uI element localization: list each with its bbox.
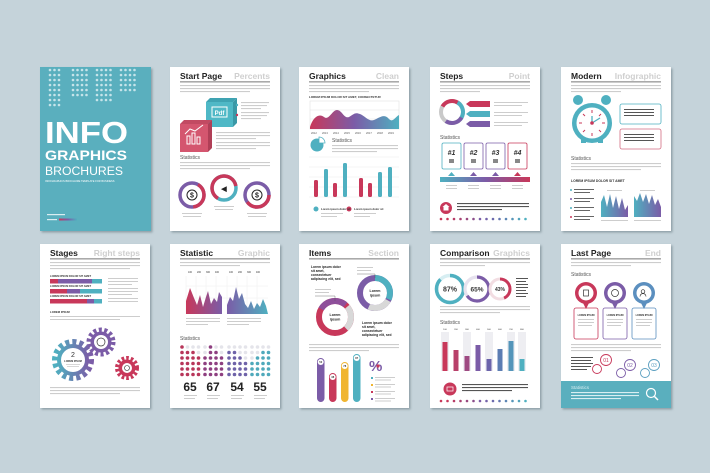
percent legend xyxy=(369,358,395,402)
cover title xyxy=(45,115,128,183)
gears: LOREM IPSUM xyxy=(64,360,82,363)
panel: last page xyxy=(561,244,671,408)
text blocks: adipiscing elit, sed xyxy=(311,277,340,281)
panel: start page: $ xyxy=(255,192,259,200)
dots row xyxy=(440,400,527,402)
heading: Graphics xyxy=(309,71,346,81)
heading: Graphics xyxy=(493,248,530,258)
pin icons with boxes: LOREM IPSUM xyxy=(607,314,623,317)
bar chart: 100 xyxy=(443,329,448,331)
icon: home circle + text xyxy=(440,202,529,214)
panel: cover xyxy=(40,67,151,231)
area chart: 2012 xyxy=(311,131,317,135)
icon: teal presentation box: Pdf xyxy=(215,111,225,117)
icon: teal presentation box xyxy=(206,98,237,127)
heading xyxy=(440,248,530,259)
percent donuts: 43% xyxy=(495,287,506,293)
heading: Point xyxy=(509,71,530,81)
statistics text: Statistics xyxy=(180,155,201,161)
heading: Clean xyxy=(376,71,399,81)
dot grids xyxy=(180,345,270,376)
donut 1: Lorem xyxy=(370,289,380,293)
area charts: 300 xyxy=(247,271,252,274)
heading xyxy=(571,248,661,259)
icon: pink chart box xyxy=(180,120,212,152)
panel: graphics xyxy=(299,67,409,231)
legend xyxy=(314,206,383,217)
panel: stages: LOREM IPSUM xyxy=(50,310,70,314)
heading: Percents xyxy=(234,71,270,81)
pin icons with boxes: LOREM IPSUM xyxy=(578,314,594,317)
area chart: 2013 xyxy=(322,131,328,135)
progress bars: LOREM IPSUM DOLOR SIT AMET xyxy=(50,294,92,298)
donut 2: Lorem xyxy=(330,313,340,317)
callout boxes xyxy=(620,104,661,149)
text blocks: consectetuer xyxy=(311,273,332,277)
heading: Start Page xyxy=(180,71,222,81)
bar chart: 500 xyxy=(487,329,492,331)
donut 1: ipsum xyxy=(370,294,380,298)
heading: Stages xyxy=(50,248,78,258)
bar chart: 800 xyxy=(520,329,525,331)
panel: start page: $ xyxy=(190,192,194,200)
bullets xyxy=(216,102,270,149)
bar chart: 300 xyxy=(465,329,470,331)
panel: steps: #1 xyxy=(448,150,455,157)
panel: steps: #4 xyxy=(514,150,521,157)
area charts: 100 xyxy=(188,271,193,274)
numbered circles: 02 xyxy=(627,363,633,369)
legend: Lorem ipsum dolor sit xyxy=(354,207,383,211)
heading: Graphic xyxy=(238,248,270,258)
bar chart: 600 xyxy=(498,329,503,331)
numbers: 67 xyxy=(206,380,220,394)
area charts: 200 xyxy=(197,271,202,274)
percent donuts: 65% xyxy=(470,286,484,294)
icon: pie xyxy=(310,137,325,152)
pin icons with boxes: LOREM IPSUM xyxy=(636,314,652,317)
heading: Right steps xyxy=(94,248,140,258)
panel: items xyxy=(299,244,409,408)
footer band: Statistics xyxy=(571,385,590,390)
panel: steps: #3 xyxy=(492,150,499,157)
icon: alarm clock xyxy=(572,95,612,143)
heading xyxy=(309,71,399,82)
numbers xyxy=(183,380,267,394)
panel: stages xyxy=(40,244,150,408)
donut xyxy=(437,97,467,127)
statistics text xyxy=(332,138,398,152)
statistics text: Statistics xyxy=(332,138,353,144)
dots row xyxy=(440,218,527,220)
arrows xyxy=(466,101,528,127)
area charts xyxy=(186,271,268,325)
heading xyxy=(309,248,399,259)
bar chart: 400 xyxy=(476,329,481,331)
progress bars: LOREM IPSUM DOLOR SIT AMET xyxy=(50,284,92,288)
area charts: 100 xyxy=(229,271,234,274)
pin icons with boxes xyxy=(574,282,656,339)
heading xyxy=(180,71,270,82)
percent legend: % xyxy=(369,358,382,375)
heading: Last Page xyxy=(571,248,611,258)
area charts: 400 xyxy=(256,271,261,274)
heading: Infographic xyxy=(615,71,661,81)
timeline bar xyxy=(440,172,530,189)
heading: Statistic xyxy=(180,248,213,258)
bar chart xyxy=(441,329,526,371)
panel: statistic: Statistics xyxy=(180,336,201,342)
area charts: 400 xyxy=(215,271,220,274)
area chart: 2018 xyxy=(377,131,383,135)
footer band xyxy=(561,381,671,408)
area chart: 2015 xyxy=(344,131,350,135)
dot pattern xyxy=(49,69,136,106)
bar chart: 200 xyxy=(454,329,459,331)
cover title: INFOGRAPHICS BROCHURE TEMPLATE FOR BUSINESS xyxy=(45,179,115,183)
text blocks xyxy=(311,265,393,337)
cover footer xyxy=(47,214,77,220)
numbers: 54 xyxy=(230,380,244,394)
donut 2 xyxy=(312,289,358,340)
legend: Lorem ipsum dolor sit xyxy=(321,207,350,211)
heading: Modern xyxy=(571,71,602,81)
numbers: 65 xyxy=(183,380,197,394)
text blocks: Lorem ipsum dolor xyxy=(311,265,342,269)
cover title: BROCHURES xyxy=(45,166,123,178)
area charts: 200 xyxy=(238,271,243,274)
heading xyxy=(571,71,661,82)
gears xyxy=(55,330,137,378)
percent donuts: 87% xyxy=(443,286,458,294)
panel: modern xyxy=(561,67,671,231)
progress bars: LOREM IPSUM DOLOR SIT AMET xyxy=(50,274,92,278)
step boxes xyxy=(442,143,527,169)
statistics text xyxy=(180,155,270,169)
numbered circles: 03 xyxy=(651,363,657,369)
cover title: GRAPHICS xyxy=(45,147,127,163)
heading: Section xyxy=(368,248,399,258)
numbered circles xyxy=(571,354,660,378)
heading: Comparison xyxy=(440,248,490,258)
area chart: 2019 xyxy=(388,131,394,135)
icon: circle + text xyxy=(444,382,528,396)
panel: last page: Statistics xyxy=(571,272,592,278)
text blocks: sit amet, xyxy=(362,325,375,329)
area chart: 2017 xyxy=(366,131,372,135)
numbers: 55 xyxy=(253,380,267,394)
progress bars xyxy=(50,274,138,304)
area chart: 2014 xyxy=(333,131,339,135)
heading: End xyxy=(645,248,661,258)
bar chart: 52 xyxy=(319,360,323,364)
bar chart: 38 xyxy=(331,375,335,379)
bar chart: 78 xyxy=(343,364,347,368)
text blocks: adipiscing elit, sed xyxy=(362,333,392,337)
panel: steps: #2 xyxy=(470,150,477,157)
bar chart xyxy=(309,157,399,197)
donut charts xyxy=(176,172,269,211)
donut 2: ipsum xyxy=(330,318,340,322)
bar chart xyxy=(317,354,360,402)
bullet list xyxy=(570,189,594,220)
text blocks: sit amet, xyxy=(311,269,324,273)
cover title: INFO xyxy=(45,115,128,150)
bar chart: 87 xyxy=(355,356,359,360)
panel: graphics: LOREM IPSUM DOLOR SIT AMET, CONSECTETUR xyxy=(309,95,382,99)
panel: steps: Statistics xyxy=(440,135,461,141)
gears: 2 xyxy=(71,352,75,359)
panel: modern: Statistics xyxy=(571,156,592,162)
panel: statistic xyxy=(170,244,280,408)
heading xyxy=(50,248,140,259)
area chart: 2016 xyxy=(355,131,361,135)
text blocks: consectetuer xyxy=(362,329,383,333)
heading xyxy=(440,71,530,82)
panel: comparison xyxy=(430,244,540,408)
bar chart: 700 xyxy=(509,329,514,331)
percent donuts xyxy=(436,276,528,302)
numbered circles: 01 xyxy=(603,358,609,364)
donut 1 xyxy=(355,267,395,313)
heading xyxy=(180,248,270,259)
panel: comparison: Statistics xyxy=(440,320,461,326)
area charts xyxy=(601,190,661,221)
text blocks: Lorem ipsum dolor xyxy=(362,321,393,325)
area charts: 300 xyxy=(206,271,211,274)
panel: modern: LOREM IPSUM DOLOR SIT AMET xyxy=(571,179,626,183)
area chart xyxy=(310,101,399,135)
heading: Items xyxy=(309,248,331,258)
heading: Steps xyxy=(440,71,463,81)
panel: start page: ◀ xyxy=(220,186,227,193)
panel: start page xyxy=(170,67,280,231)
panel: steps xyxy=(430,67,540,231)
